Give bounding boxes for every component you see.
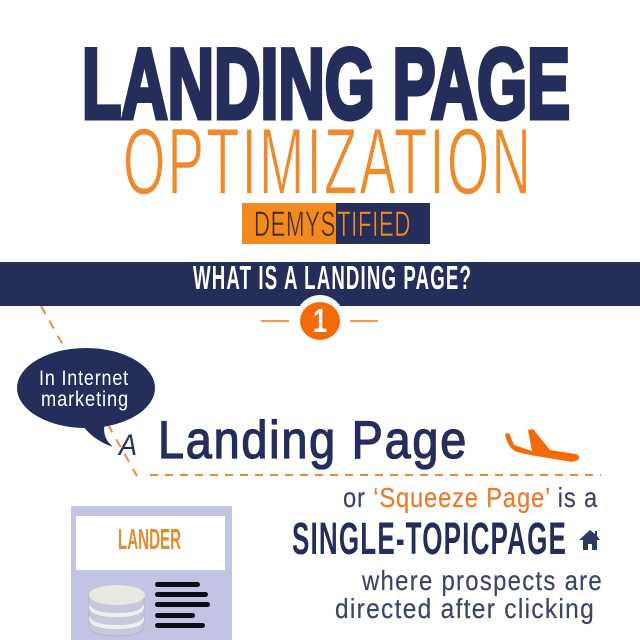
text lines icon bbox=[155, 582, 210, 628]
text: where prospects are directed after clicking: directed after clicking bbox=[335, 593, 595, 624]
section number 1 bbox=[261, 295, 378, 343]
text: where prospects are directed after clicking bbox=[335, 565, 603, 624]
panel: lander illustration bbox=[71, 506, 232, 640]
speech bubble bbox=[17, 348, 155, 447]
section number 1: 1 bbox=[313, 302, 327, 339]
icon: house bbox=[579, 530, 600, 550]
heading: a landing page: Landing Page bbox=[158, 411, 468, 470]
speech bubble: In Internet bbox=[39, 367, 129, 390]
panel: lander illustration: LANDER bbox=[118, 524, 181, 556]
speech bubble: marketing bbox=[41, 388, 129, 411]
badge: demystified bbox=[242, 203, 430, 244]
text: where prospects are directed after clicking: where prospects are bbox=[361, 565, 603, 596]
dashed diagonal path bbox=[41, 306, 137, 476]
dashed divider bbox=[150, 474, 601, 476]
icon: database stack bbox=[89, 585, 145, 636]
icon: airplane bbox=[505, 429, 579, 462]
text: or squeeze page is a: or ‘Squeeze Page’ is a bbox=[343, 482, 598, 513]
badge: demystified: TIFIED bbox=[337, 205, 411, 244]
section band: what is a landing page bbox=[0, 259, 640, 306]
heading: a landing page: A bbox=[117, 429, 137, 462]
badge: demystified: DEMYS bbox=[254, 205, 336, 244]
